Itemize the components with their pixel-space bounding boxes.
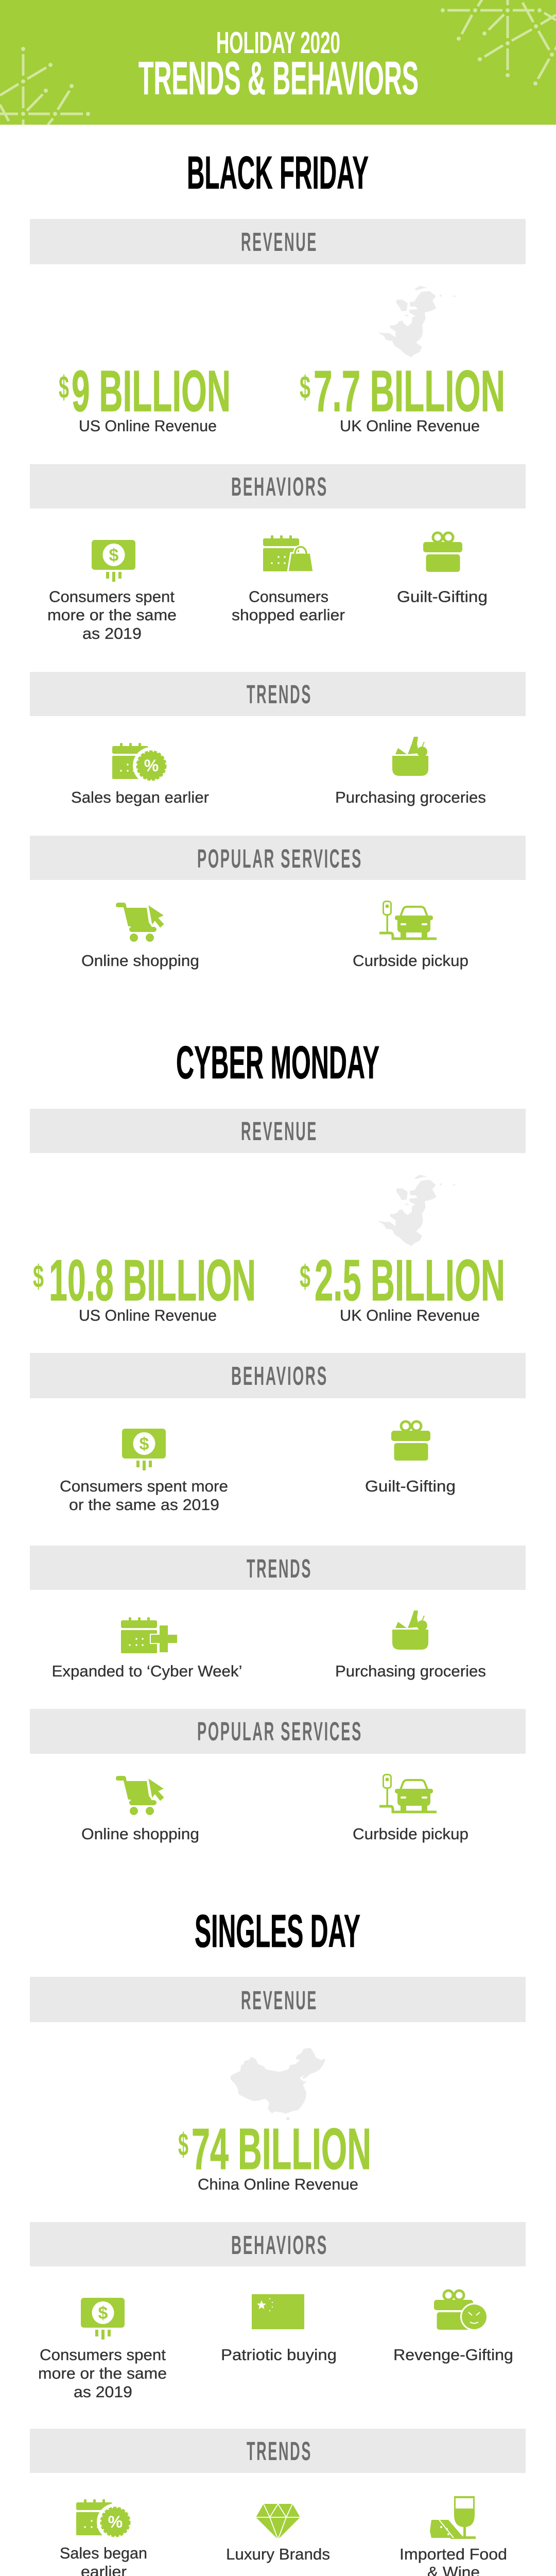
stat: US revenue: $	[59, 370, 69, 405]
label: consumers shopped earlier	[232, 587, 345, 624]
label: consumers spent more	[38, 2346, 167, 2401]
bar: behaviors	[30, 1353, 526, 1398]
icon: calendar sale	[112, 743, 170, 784]
label: consumers spent more: or the same as 2019	[69, 1496, 219, 1514]
bar: popular services: POPULAR SERVICES	[197, 1717, 362, 1746]
bar: behaviors: BEHAVIORS	[231, 2230, 328, 2260]
label: patriotic buying: Patriotic buying	[221, 2346, 337, 2364]
label: consumers spent more: Consumers spent more	[60, 1477, 228, 1495]
bar: trends: TRENDS	[247, 1554, 312, 1583]
bar: trends: TRENDS	[247, 680, 312, 709]
label: luxury brands: Luxury Brands	[226, 2545, 330, 2563]
label: online shopping: Online shopping	[81, 1825, 199, 1843]
bar: revenue	[30, 1109, 526, 1153]
stat: US revenue	[59, 359, 231, 435]
bar: behaviors	[30, 464, 526, 509]
icon: food and wine	[430, 2496, 476, 2539]
icon: money: $	[98, 2303, 108, 2323]
icon: calendar sale: %	[108, 2513, 123, 2531]
label: guilt-gifting: Guilt-Gifting	[365, 1477, 456, 1495]
icon: diamond	[256, 2504, 300, 2539]
section title: Black Friday: BLACK FRIDAY	[187, 147, 369, 199]
stat: US revenue: US Online Revenue	[79, 417, 217, 435]
label: consumers shopped earlier: Consumers	[249, 587, 328, 606]
label: purchasing groceries: Purchasing groceries	[335, 788, 486, 806]
icon: calendar sale: %	[144, 756, 159, 775]
icon: money	[92, 540, 135, 582]
icon: calendar sale	[76, 2499, 134, 2540]
icon: money	[122, 1429, 166, 1470]
bar: revenue: REVENUE	[241, 1986, 318, 2015]
bar: behaviors: BEHAVIORS	[231, 472, 328, 501]
stat: China revenue: $	[178, 2127, 188, 2163]
label: imported food and wine	[399, 2545, 507, 2576]
label: consumers spent more: more or the same	[47, 606, 177, 624]
stat: UK revenue: UK Online Revenue	[340, 417, 480, 435]
label: sales began earlier	[60, 2544, 147, 2576]
label: consumers spent more: Consumers spent	[49, 587, 175, 606]
stat: US revenue: 10.8 BILLION	[49, 1248, 256, 1313]
icon: calendar and bag	[263, 535, 314, 572]
stat: UK revenue	[300, 1248, 505, 1324]
section title: Singles Day: SINGLES DAY	[195, 1906, 360, 1957]
icon: gift	[391, 1421, 430, 1461]
label: consumers spent more: more or the same	[38, 2364, 167, 2382]
label: cyber week: Expanded to ‘Cyber Week’	[51, 1662, 242, 1680]
stat: UK revenue: $	[300, 1259, 310, 1295]
heading: Holiday 2020: HOLIDAY 2020	[216, 26, 340, 60]
label: online shopping: Online shopping	[81, 952, 199, 970]
bar: revenue: REVENUE	[241, 227, 318, 257]
stat: US revenue: 9 BILLION	[72, 359, 231, 423]
map: UK	[377, 286, 457, 357]
bar: trends	[30, 672, 526, 716]
map: China	[230, 2048, 326, 2121]
label: curbside pickup: Curbside pickup	[353, 952, 468, 970]
bar: popular services	[30, 1709, 526, 1754]
header banner	[0, 0, 556, 125]
stat: US revenue: $	[33, 1259, 44, 1295]
icon: money: $	[109, 546, 119, 565]
stat: UK revenue	[300, 359, 505, 435]
stat: UK revenue: $	[300, 370, 310, 405]
bar: revenue: REVENUE	[241, 1116, 318, 1146]
stat: China revenue: 74 BILLION	[192, 2116, 371, 2181]
label: consumers shopped earlier: shopped earlier	[232, 606, 345, 624]
label: consumers spent more: as 2019	[82, 624, 142, 642]
icon: curbside	[379, 902, 437, 939]
panel: Black Friday	[30, 147, 526, 970]
label: guilt-gifting: Guilt-Gifting	[397, 587, 488, 606]
bar: trends: TRENDS	[247, 2436, 312, 2466]
bar: trends	[30, 2429, 526, 2473]
bar: revenue	[30, 1977, 526, 2022]
icon: calendar plus	[121, 1617, 177, 1653]
label: purchasing groceries: Purchasing groceries	[335, 1662, 486, 1680]
stat: US revenue	[33, 1248, 256, 1324]
stat: China revenue	[178, 2116, 371, 2193]
label: consumers spent more	[60, 1477, 228, 1514]
stat: China revenue: China Online Revenue	[198, 2175, 358, 2193]
panel: Cyber Monday	[30, 1037, 526, 1843]
panel: Singles Day	[30, 1906, 526, 2576]
label: curbside pickup: Curbside pickup	[353, 1825, 468, 1843]
label: sales began earlier: Sales began	[60, 2544, 147, 2562]
bar: popular services: POPULAR SERVICES	[197, 844, 362, 873]
icon: China flag	[252, 2294, 304, 2329]
icon: money	[81, 2298, 125, 2340]
label: consumers spent more: Consumers spent	[40, 2346, 166, 2364]
icon: cart	[116, 1776, 165, 1815]
map: UK	[377, 1175, 457, 1246]
icon: groceries	[392, 737, 428, 776]
icon: gift	[423, 533, 462, 572]
bar: behaviors	[30, 2222, 526, 2266]
stat: US revenue: US Online Revenue	[79, 1307, 217, 1324]
bar: revenue	[30, 219, 526, 264]
bar: popular services	[30, 836, 526, 880]
label: sales began earlier: Sales began earlier	[71, 788, 209, 806]
label: consumers spent more	[47, 587, 177, 642]
label: consumers spent more: as 2019	[74, 2383, 132, 2401]
bar: behaviors: BEHAVIORS	[231, 1361, 328, 1391]
icon: money: $	[140, 1434, 149, 1454]
bar: trends	[30, 1546, 526, 1590]
label: imported food and wine: Imported Food	[399, 2545, 507, 2563]
icon: curbside	[379, 1774, 437, 1812]
label: revenge-gifting: Revenge-Gifting	[393, 2346, 513, 2364]
section title: Cyber Monday: CYBER MONDAY	[176, 1037, 379, 1089]
stat: UK revenue: UK Online Revenue	[340, 1307, 480, 1324]
icon: revenge gift	[434, 2291, 488, 2331]
icon: groceries	[392, 1611, 428, 1650]
icon: cart	[116, 903, 165, 942]
